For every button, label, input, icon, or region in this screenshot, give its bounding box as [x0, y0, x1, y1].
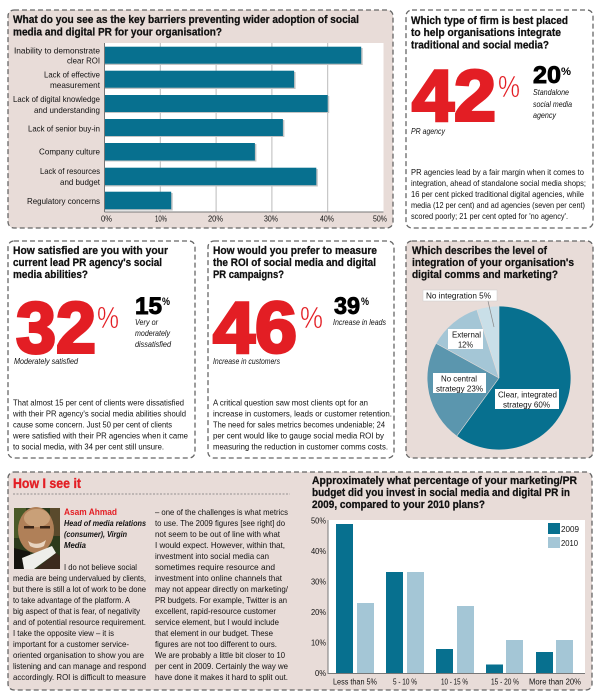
secondary stat: 15%: Very or — [135, 318, 158, 327]
text block: right column: not seem to be out of line with what — [155, 529, 281, 539]
heading: type of firm: Which type of firm is best placed — [411, 15, 568, 27]
text block: satisfaction commentary: with their PR agency's social media abilities should — [12, 408, 186, 418]
text block: right column: may not appear directly on marketing/ — [155, 584, 289, 594]
bar chart: budget 2009 vs 2010: 20% — [311, 608, 326, 617]
text block: right column — [155, 507, 289, 682]
text block: firm commentary — [411, 167, 586, 221]
heading: satisfaction: media abilities? — [13, 269, 88, 281]
bar chart: barriers: clear ROI — [67, 56, 100, 66]
text block: right column: excellent, rapid-resource customer — [155, 606, 276, 616]
text block: left column: to take advantage of the platform. A — [13, 595, 130, 605]
text block: right column: service element, but I would include — [155, 617, 279, 627]
text block: satisfaction commentary — [12, 398, 188, 452]
heading: satisfaction: How satisfied are you with your — [13, 245, 168, 257]
bar chart: budget 2009 vs 2010: 15 - 20 % — [491, 678, 519, 686]
panel: type of firm — [406, 10, 593, 228]
text block: firm commentary: PR agencies lead by a fair margin when it comes to — [411, 167, 584, 177]
text block: ROI commentary: The need for sales metrics becomes undeniable; 24 — [213, 420, 385, 430]
bar chart: barriers: and understanding — [34, 106, 100, 115]
heading: measuring ROI: the ROI of social media and digital — [213, 257, 376, 269]
text block: right column: We are probably a little bit closer to 10 — [155, 650, 285, 660]
heading: type of firm: traditional and social media? — [411, 40, 549, 52]
pie label: clear integrated strategy — [495, 389, 559, 410]
heading: key barriers — [13, 14, 359, 38]
text block: satisfaction commentary: to social media, with 34 per cent still unsure. — [13, 442, 164, 452]
panel: key barriers bar chart — [8, 10, 393, 228]
heading: key barriers: media and digital PR for your organisation? — [13, 26, 222, 38]
pie label: no integration: No integration 5% — [426, 292, 491, 300]
bar chart: barriers: 0% — [101, 214, 112, 224]
big stat: 42%: 42 — [412, 56, 496, 136]
byline: Asam Ahmad: Head of media relations — [64, 519, 146, 528]
legend — [548, 523, 580, 548]
secondary stat: 15%: moderately — [135, 329, 171, 338]
bar chart: budget 2009 vs 2010: 10 - 15 % — [441, 678, 468, 686]
text block: right column: sometimes require resource and — [155, 562, 275, 572]
heading: measuring ROI: How would you prefer to measure — [213, 245, 377, 257]
bar chart: barriers: 20% — [208, 214, 223, 224]
text block: satisfaction commentary: That almost 15 per cent of clients were dissatisfied — [13, 398, 184, 408]
bar chart: barriers: 30% — [264, 214, 278, 224]
text block: left column: big aspect of that is fear, of negativity — [13, 606, 141, 616]
secondary stat: 20%: agency — [533, 111, 557, 120]
text block: ROI commentary: per cent would like to gauge social media ROI by — [213, 430, 385, 440]
text block: right column: – one of the challenges is what metrics — [155, 507, 288, 517]
text block: ROI commentary — [213, 398, 392, 452]
heading: budget: budget did you invest in social media and digital PR in — [312, 487, 570, 499]
pie label: external: 12% — [458, 340, 473, 350]
pie label: no central strategy — [433, 373, 486, 394]
big stat: 42%: % — [498, 69, 520, 104]
secondary stat: 20%: Standalone — [533, 88, 569, 97]
heading: budget: Approximately what percentage of your marketing/PR — [312, 475, 577, 487]
byline: Asam Ahmad — [64, 507, 146, 550]
big stat: 46%: 46 — [213, 288, 297, 368]
text block: right column: have done it makes it hard to split out. — [155, 672, 288, 682]
heading: budget: 2009, compared to your 2010 plans? — [312, 499, 485, 511]
secondary stat: 15%: 15 — [135, 293, 162, 320]
big stat: 42%: PR agency — [411, 127, 446, 136]
text block: ROI commentary: increase in customers, leads or customer retention. — [213, 408, 392, 418]
bar chart: barriers: and budget — [60, 178, 101, 187]
text block: right column: that element in our budget. These — [155, 628, 273, 638]
secondary stat: 20%: social media — [533, 100, 572, 109]
text block: right column: per cent in 2009. Certainly the way we — [155, 661, 288, 671]
secondary stat: 15% — [135, 293, 171, 349]
bar chart: barriers: Lack of resources — [40, 167, 100, 176]
text block: left column: I take the opposite view – it is — [13, 628, 114, 638]
pie label: external: External — [452, 330, 481, 340]
text block: firm commentary: scored poorly; 21 per cent opted for 'no agency'. — [411, 211, 568, 221]
byline: Asam Ahmad: Asam Ahmad — [64, 507, 117, 518]
pie label: external — [448, 329, 483, 350]
bar chart: budget 2009 vs 2010: 10% — [311, 638, 326, 648]
heading: satisfaction: current lead PR agency's social — [13, 257, 162, 269]
text block: right column: to use. The 2009 figures [see right] do — [155, 518, 285, 528]
bar chart: budget 2009 vs 2010: 50% — [311, 516, 326, 526]
secondary stat: 39% — [333, 293, 386, 327]
heading: integration: digital comms and marketing? — [412, 269, 558, 281]
text block: left column: I do not believe social — [64, 562, 137, 572]
secondary stat: 15%: dissatisfied — [135, 340, 171, 349]
text block: left column: listening and can manage and respond — [13, 661, 146, 671]
text block: left column: but there is still a lot of work to be done — [13, 584, 146, 594]
heading: integration: Which describes the level of — [412, 245, 547, 257]
pie label: clear integrated strategy: strategy 60% — [503, 400, 550, 410]
text block: left column: and of potential resource requirement. — [13, 617, 146, 627]
secondary stat: 39%: 39 — [334, 293, 360, 320]
text block: left column: media are being undervalued by clients, — [13, 573, 146, 583]
bar chart: barriers: Regulatory concerns — [27, 197, 100, 206]
text block: left column: oriented organisation to show you are — [13, 650, 144, 660]
secondary stat: 15%: % — [162, 296, 170, 308]
byline: Asam Ahmad: (consumer), Virgin — [64, 530, 127, 539]
text block: left column: important for a customer service- — [13, 639, 129, 649]
text block: ROI commentary: A critical question saw most clients opt for an — [213, 398, 368, 408]
bar chart: budget 2009 vs 2010: More than 20% — [529, 678, 581, 686]
bar chart: barriers: Company culture — [39, 148, 100, 156]
bar chart: budget 2009 vs 2010: 0% — [315, 669, 326, 678]
text block: right column: investment into social media can — [155, 551, 269, 561]
text block: ROI commentary: measuring the reduction in customer comms costs. — [213, 442, 388, 452]
bar chart: barriers: 40% — [320, 214, 334, 224]
secondary stat: 20%: % — [561, 66, 571, 78]
text block: satisfaction commentary: cause some concern. Just 50 per cent of clients — [13, 420, 172, 430]
pie label: no central strategy: strategy 23% — [436, 384, 483, 394]
heading: satisfaction — [13, 245, 168, 281]
text block: firm commentary: 16 per cent picked traditional digital agencies, while — [411, 189, 584, 199]
legend: 2009 — [561, 525, 580, 534]
heading: integration — [412, 245, 574, 281]
secondary stat: 20% — [533, 62, 572, 120]
heading: measuring ROI: PR campaigns? — [213, 269, 284, 281]
text block: satisfaction commentary: were satisfied with their PR agencies when it came — [12, 430, 188, 440]
bar chart: budget 2009 vs 2010: 40% — [311, 547, 326, 556]
photo: Asam Ahmad — [14, 507, 60, 569]
text block: left column: accordingly. ROI is difficult to measure — [13, 672, 146, 682]
bar chart: barriers — [13, 43, 387, 224]
pie label: no integration — [423, 290, 497, 327]
panel: measuring ROI — [208, 241, 394, 458]
bar chart: budget 2009 vs 2010: Less than 5% — [333, 678, 377, 686]
panel: integration pie chart — [406, 241, 593, 458]
bar chart: budget 2009 vs 2010: 5 - 10 % — [393, 678, 417, 686]
bar chart: barriers: Inability to demonstrate — [14, 46, 100, 56]
text block: right column: PR budgets. For example, Twitter is an — [155, 595, 287, 605]
heading: measuring ROI — [213, 245, 377, 281]
heading: how I see it: How I see it — [13, 476, 81, 491]
text block: right column: figures are not too different to ours. — [155, 639, 277, 649]
pie label: no central strategy: No central — [441, 374, 477, 384]
bar chart: barriers: measurement — [50, 81, 101, 90]
bar chart: barriers: Lack of senior buy-in — [28, 124, 100, 134]
text block: right column: I would expect. However, within that, — [155, 540, 285, 550]
bar chart: budget 2009 vs 2010 — [311, 516, 585, 686]
text block: right column: investment into online channels that — [155, 573, 283, 583]
pie chart: integration — [423, 290, 571, 450]
heading: type of firm — [411, 15, 568, 52]
heading: integration: integration of your organisation's — [412, 257, 574, 269]
heading: key barriers: What do you see as the key barriers preventing wider adoption of social — [13, 14, 359, 26]
heading: budget — [312, 475, 577, 511]
secondary stat: 39%: Increase in leads — [333, 318, 386, 327]
text block: left column — [13, 562, 146, 682]
big stat: 46%: Increase in customers — [213, 357, 280, 366]
big stat: 32%: 32 — [16, 288, 96, 368]
pie label: clear integrated strategy: Clear, integrated — [498, 390, 557, 400]
bar chart: barriers: Lack of digital knowledge — [13, 95, 100, 104]
legend: 2010 — [561, 539, 579, 548]
bar chart: barriers: Lack of effective — [44, 70, 100, 80]
panel: satisfaction — [8, 241, 195, 458]
byline: Asam Ahmad: Media — [64, 541, 86, 550]
bar chart: barriers: 50% — [373, 214, 387, 224]
secondary stat: 39%: % — [361, 296, 369, 308]
big stat: 46%: % — [300, 300, 323, 335]
big stat: 32%: % — [97, 300, 119, 335]
big stat: 32%: Moderately satisfied — [14, 357, 78, 366]
heading: type of firm: to help organisations integrate — [411, 27, 561, 39]
panel: how I see it and budget chart — [8, 472, 592, 690]
bar chart: barriers: 10% — [155, 214, 167, 224]
bar chart: budget 2009 vs 2010: 30% — [311, 578, 326, 586]
secondary stat: 20%: 20 — [533, 62, 561, 89]
